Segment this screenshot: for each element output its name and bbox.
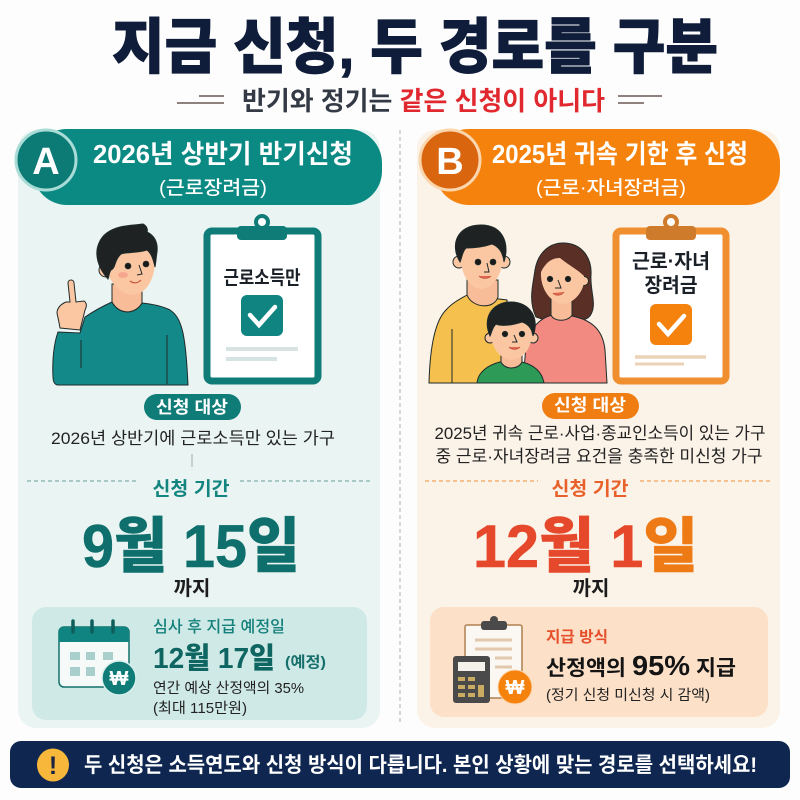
clipboard: earned income only: 근로소득만 [224,267,300,289]
icon: warning [37,748,69,782]
deadline date: 12월 1일 [473,513,698,580]
target description [434,424,766,466]
deadline suffix: 까지 [174,577,210,600]
info box: payment date: (예정) [285,654,326,671]
info box: payment method: 산정액의 95% 지급 [546,650,736,681]
mother [523,243,607,383]
target description: 중 근로·자녀장려금 요건을 충족한 미신청 가구 [436,447,762,466]
target description: 2025년 귀속 근로·사업·종교인소득이 있는 가구 [434,424,766,443]
bottom notice bar: 두 신청은 소득연도와 신청 방식이 다릅니다. 본인 상황에 맞는 경로를 선택하세요! [84,754,757,777]
father [429,225,510,383]
header: route A: A [32,141,60,183]
icon: calendar with won coin [59,621,136,695]
header: route A: (근로장려금) [159,177,267,199]
header: route B: (근로·자녀장려금) [536,177,686,199]
icon: warning: ! [49,752,57,780]
badge: target: 신청 대상 [156,398,228,417]
header: route A [16,129,382,205]
badge: target [144,394,241,420]
info box: payment date [32,607,367,720]
deadline date: 9월 15일 [82,513,300,580]
info box: payment date: 심사 후 지급 예정일 [153,618,285,636]
icon: clipboard, calculator and won coin: ₩ [506,677,525,699]
illustration: family [429,225,607,383]
badge: target [542,393,639,419]
info box: payment date: (최대 115만원) [153,700,247,717]
clipboard: earned income only [207,216,318,381]
header: route B: B [436,141,464,183]
header: route B: 2025년 귀속 기한 후 신청 [492,139,748,169]
info box: payment method: (정기 신청 미신청 시 감액) [546,687,710,704]
clipboard: earned and child incentive: 장려금 [644,274,698,297]
info box: payment method: 지급 방식 [546,628,608,646]
panel: route A [16,129,382,728]
panel: route B [417,129,780,728]
subtitle: 반기와 정기는 같은 신청이 아니다 [242,86,605,116]
icon: calendar with won coin: ₩ [110,668,129,690]
header: route B [420,129,780,205]
header: route A: 2026년 상반기 반기신청 [93,139,353,169]
info box: payment date: 12월 17일 [153,642,275,675]
heading: deadline: 신청 기간 [152,478,230,500]
info box: payment method [430,607,768,717]
child [477,302,544,383]
icon: clipboard, calculator and won coin [453,616,532,704]
info box: payment date: 연간 예상 산정액의 35% [153,680,304,697]
deadline suffix: 까지 [573,577,609,600]
heading: deadline: 신청 기간 [552,478,628,500]
bottom notice bar [10,741,790,788]
target description: 2026년 상반기에 근로소득만 있는 가구 [51,429,335,448]
title: 지금 신청, 두 경로를 구분 [112,14,718,81]
illustration: man pointing up [53,224,188,385]
badge: target: 신청 대상 [554,396,626,415]
clipboard: earned and child incentive: 근로·자녀 [632,250,710,273]
clipboard: earned and child incentive [616,216,726,381]
